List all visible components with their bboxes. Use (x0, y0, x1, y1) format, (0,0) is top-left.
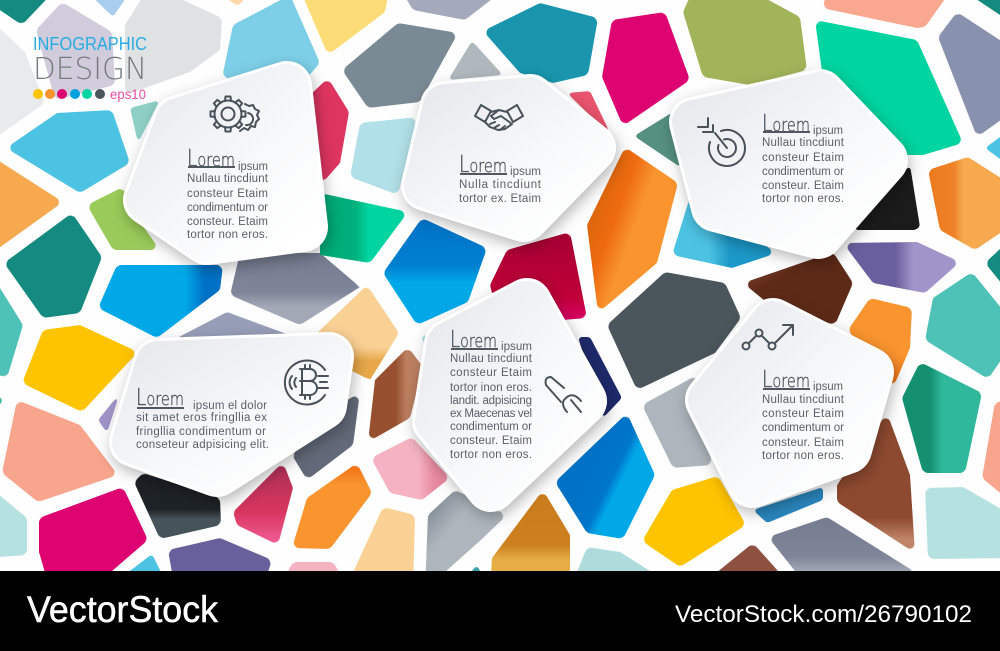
icon: gears (210, 96, 259, 132)
body text: Nullau tincdiunt (762, 394, 845, 406)
card shape (437, 303, 582, 487)
heading: Lorem ipsum (450, 327, 532, 353)
icon: broken chain (546, 377, 581, 412)
body text: consteur. Etaim (762, 180, 844, 192)
footer brand: VectorStock (27, 589, 218, 630)
body text: tortor inon eros. (450, 382, 532, 394)
heading: Lorem ipsum: Lorem (187, 146, 235, 172)
heading: Lorem ipsum (187, 146, 268, 173)
card shape (694, 94, 883, 234)
body text: tortor ex. Etaim (459, 193, 541, 205)
heading: Lorem ipsum: ipsum (238, 161, 268, 173)
card shape (426, 99, 591, 217)
body text: consteur. Etaim (762, 437, 844, 449)
body text: tortor non eros. (762, 193, 844, 205)
body text: consteur. Etaim (450, 435, 532, 447)
heading: Lorem ipsum: Lorem (762, 367, 810, 393)
icon: handshake (475, 105, 523, 130)
body text: conseteur adpisicing elit. (136, 439, 269, 451)
logo label eps10: eps10 (110, 86, 146, 102)
body text: ex Maecenas vel (450, 408, 532, 420)
body text (187, 173, 269, 241)
body text: landit. adpisicing (450, 395, 532, 407)
body text: tortor non eros. (450, 449, 532, 461)
icon: bitcoin (285, 360, 328, 404)
body text: Nulla tincdiunt (459, 179, 542, 191)
card shape (148, 86, 303, 240)
body text: tortor non eros. (187, 229, 268, 241)
footer url: VectorStock.com/26790102 (675, 601, 972, 628)
heading: Lorem: Lorem (136, 385, 184, 411)
panel: chain link card (437, 303, 582, 487)
panel: target card (694, 94, 883, 234)
body text: Nullau tincdiunt (187, 173, 269, 185)
logo: infographic design eps10 (33, 34, 147, 102)
body text: Nullau tincdiunt (762, 137, 845, 149)
heading: Lorem ipsum: ipsum (813, 125, 843, 137)
body text: fringllia condimentum or (136, 426, 266, 438)
body text (459, 179, 542, 205)
heading: Lorem ipsum: Lorem (762, 111, 810, 137)
panel: settings card (148, 86, 303, 241)
body text: condimentum or (450, 421, 532, 433)
body text: ipsum el dolor (193, 400, 267, 412)
body text (136, 400, 269, 451)
heading: Lorem ipsum (459, 152, 541, 178)
body text (450, 353, 533, 461)
body text: consteur. Etaim (187, 216, 268, 228)
body text: consteur Etaim (187, 188, 268, 200)
footer bar (0, 571, 1000, 651)
body text: consteur Etaim (450, 367, 532, 379)
panel: bitcoin card (134, 357, 329, 472)
body text: Nullau tincdiunt (450, 353, 533, 365)
body text: tortor non eros. (762, 450, 844, 462)
card shape (134, 357, 329, 472)
body text: condimentum or (762, 166, 844, 178)
logo word DESIGN: DESIGN (33, 52, 147, 87)
icon: rising line chart (742, 325, 793, 350)
heading: Lorem ipsum: Lorem (450, 327, 497, 353)
icon: target with arrow (698, 118, 745, 166)
panel: handshake card (426, 99, 591, 217)
panel: growth chart card (710, 323, 869, 483)
body text: consteur Etaim (762, 408, 844, 420)
logo word INFOGRAPHIC: INFOGRAPHIC (33, 34, 147, 54)
heading: Lorem ipsum: ipsum (501, 341, 532, 353)
heading: Lorem ipsum: ipsum (813, 381, 843, 393)
body text: condimentum or (762, 422, 844, 434)
logo colour dots (33, 89, 105, 99)
body text: consteur Etaim (762, 152, 844, 164)
body text (762, 137, 845, 205)
card shape (710, 323, 869, 483)
heading: Lorem ipsum: Lorem (459, 152, 507, 178)
body text: condimentum or (187, 202, 268, 214)
body text (762, 394, 845, 462)
heading: Lorem ipsum: ipsum (510, 166, 541, 178)
body text: sit amet eros fringllia ex (136, 412, 267, 424)
